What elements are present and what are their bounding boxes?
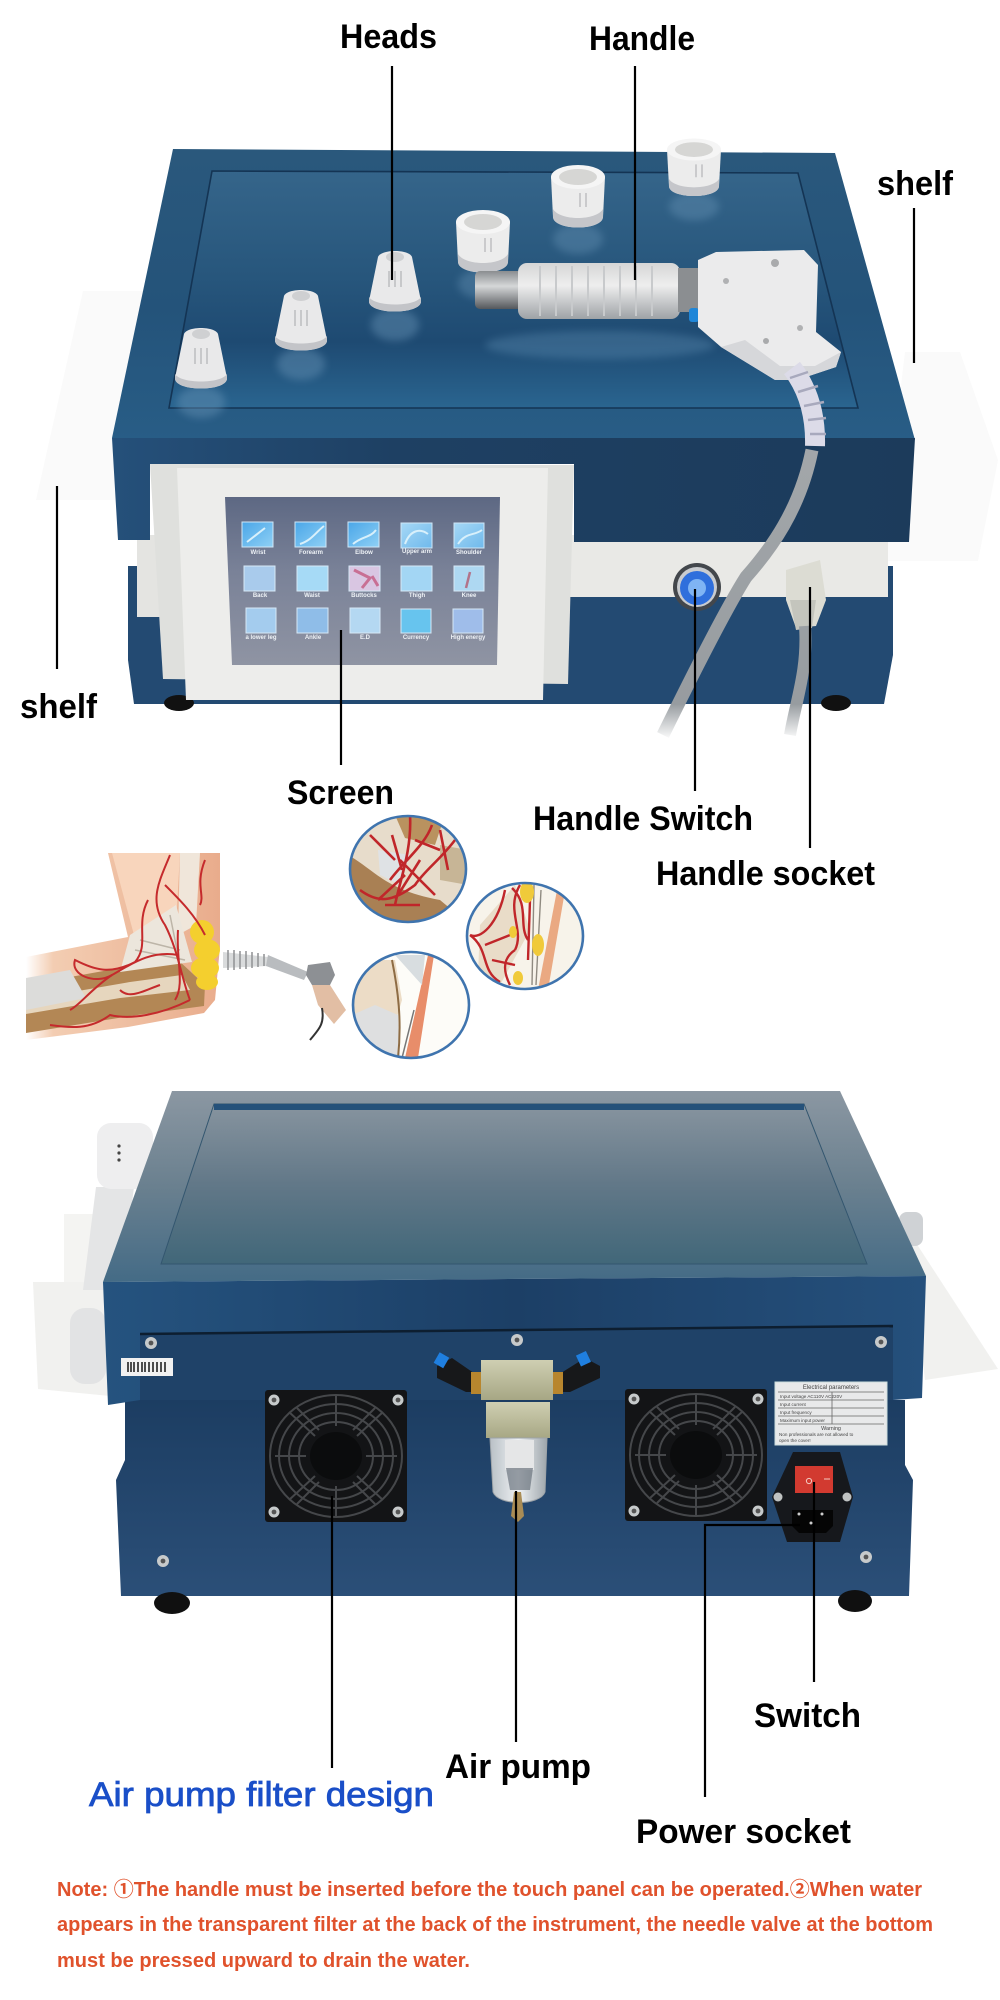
detail circle top [348,815,470,925]
handle reflection [485,331,715,359]
label: Handle: Handle [589,20,695,58]
lid front face [112,438,915,542]
red switch [795,1466,833,1493]
note text [57,1878,933,1972]
blue ring [689,308,699,322]
regulator lower box [486,1402,550,1438]
label: Switch: Switch [754,1697,861,1735]
leader line: shelf left [56,486,58,669]
arm [26,853,220,1040]
base unit [128,566,893,704]
shelf: left, top view [36,291,150,500]
touch screen [225,497,500,665]
fittings [437,1358,481,1392]
leader line: handle switch [694,589,696,791]
lower shelf plate [33,1282,110,1396]
lid rear face [103,1276,926,1405]
electrical parameters label: Input frequency [780,1410,812,1415]
foot left [154,1592,190,1614]
note line 2: appears in the transparent filter at the back of the instrument, the needle valve at the bottom [57,1914,933,1936]
leader line: air pump filter [331,1496,333,1768]
regulator upper box [481,1360,553,1400]
lid inner panel [161,1104,867,1264]
label: shelf right: shelf [877,165,954,203]
screen icons row 3: Ankle [305,635,322,641]
handle neck [678,268,702,312]
leader line: heads [391,66,393,280]
handle grip [518,263,680,319]
head 6 [667,139,721,220]
fat deposits [190,920,220,990]
lid top surface [103,1091,926,1282]
screen icons row 3: High energy [451,635,486,641]
middle casing [137,535,888,597]
screen icons row 1: Forearm [299,550,323,556]
label: Handle socket: Handle socket [656,855,875,893]
leader line: power socket [705,1525,800,1797]
detail circle bottom [350,952,472,1060]
tendons [120,905,192,972]
handle [475,250,841,380]
panel bezel [177,468,548,700]
shelf: right, top view [880,352,998,561]
fan left [265,1390,407,1522]
electrical parameters label [775,1382,887,1445]
lower body [116,1400,913,1596]
air pump assembly [434,1351,600,1522]
hose from handle [663,450,812,735]
electrical parameters label: Maximum input power [780,1418,825,1423]
electrical parameters label: open the cover! [779,1438,811,1443]
handle head [97,1123,153,1189]
heads [175,139,721,418]
handle switch [673,563,721,611]
upper shelf plate [64,1214,128,1282]
electrical parameters label: Electrical parameters [803,1385,859,1391]
power module [772,1452,853,1542]
screen icons row 2: Waist [304,593,320,599]
panel bezel outer [150,464,574,684]
label: Heads: Heads [340,18,437,56]
rear machine [103,1091,926,1614]
head 1 [175,328,227,418]
leader line: handle [634,66,636,280]
label: Power socket: Power socket [636,1813,851,1851]
socket hose [790,626,805,735]
shelf behind rear machine, right [899,1212,998,1380]
fan right [625,1389,767,1521]
detail circle right [465,881,585,990]
leader line: shelf right [913,208,915,363]
recessed rear panel [140,1326,893,1400]
note line 3: must be pressed upward to drain the water. [57,1950,470,1972]
label: shelf left: shelf [20,688,98,726]
head 5 [551,165,605,254]
screen icons row 1: Elbow [355,550,373,556]
foot right [821,695,851,711]
leader line: switch [813,1482,815,1682]
lid inner back edge [214,1104,804,1110]
electrical parameters label: Warning [821,1426,841,1432]
label: Air pump filter design: Air pump filter design [89,1776,434,1814]
barcode sticker [121,1358,173,1376]
screen icons row 2: Buttocks [351,593,377,599]
upper arm muscle [112,853,180,935]
head 3 [369,251,421,341]
panel top shadow [140,1326,893,1334]
strain relief [792,368,815,446]
gun body [698,250,841,380]
right side head rings [899,1212,923,1246]
label: Handle Switch: Handle Switch [533,800,753,838]
label: Screen: Screen [287,774,394,812]
head 4 [456,210,510,299]
leader line: air pump [515,1491,517,1742]
screen icons row 2: Back [253,593,268,599]
handle grip [70,1308,106,1384]
screen icons row 1: Shoulder [456,550,483,556]
label: Air pump: Air pump [445,1748,591,1786]
screen icons row 1 [242,522,484,556]
screen icons row 3: Currency [403,635,430,641]
elbow illustration [26,815,585,1060]
handle socket [786,560,826,630]
casing left strip [137,535,167,617]
screws [145,1334,887,1567]
electrical parameters label: Input voltage AC110V AC220V [780,1394,843,1399]
transparent filter [490,1438,547,1502]
screen icons row 1: Wrist [251,550,265,556]
drain valve [511,1492,524,1522]
power inlet [792,1510,833,1533]
screen icons row 2: Thigh [409,593,425,599]
note line 1: Note: ①The handle must be inserted before the touch panel can be operated.②When water [57,1878,922,1901]
foot right [838,1590,872,1612]
lid inner panel [169,171,858,408]
screen icons row 2 [244,566,484,599]
head 2 [275,290,327,380]
screen icons row 3: E.D [360,635,371,641]
electrical parameters label: Non professionals are not allowed to [779,1432,854,1437]
leader line: screen [340,630,342,765]
blue connectors [434,1352,449,1368]
foot left [164,695,194,711]
screen icons row 2: Knee [462,593,477,599]
bones [26,960,205,1033]
leader line: handle socket [809,587,811,848]
lid top surface [112,149,915,440]
screen icons row 3: a lower leg [245,635,277,641]
screen icons row 3 [245,608,486,641]
screen icons row 1: Upper arm [402,549,432,555]
front machine [112,139,915,735]
shelf and handle behind rear machine, left [33,1123,153,1396]
handle tip [475,271,523,309]
electrical parameters label: Input current [780,1402,807,1407]
handle shaft [83,1187,134,1290]
shockwave gun [223,950,346,1040]
arteries [50,855,205,1027]
